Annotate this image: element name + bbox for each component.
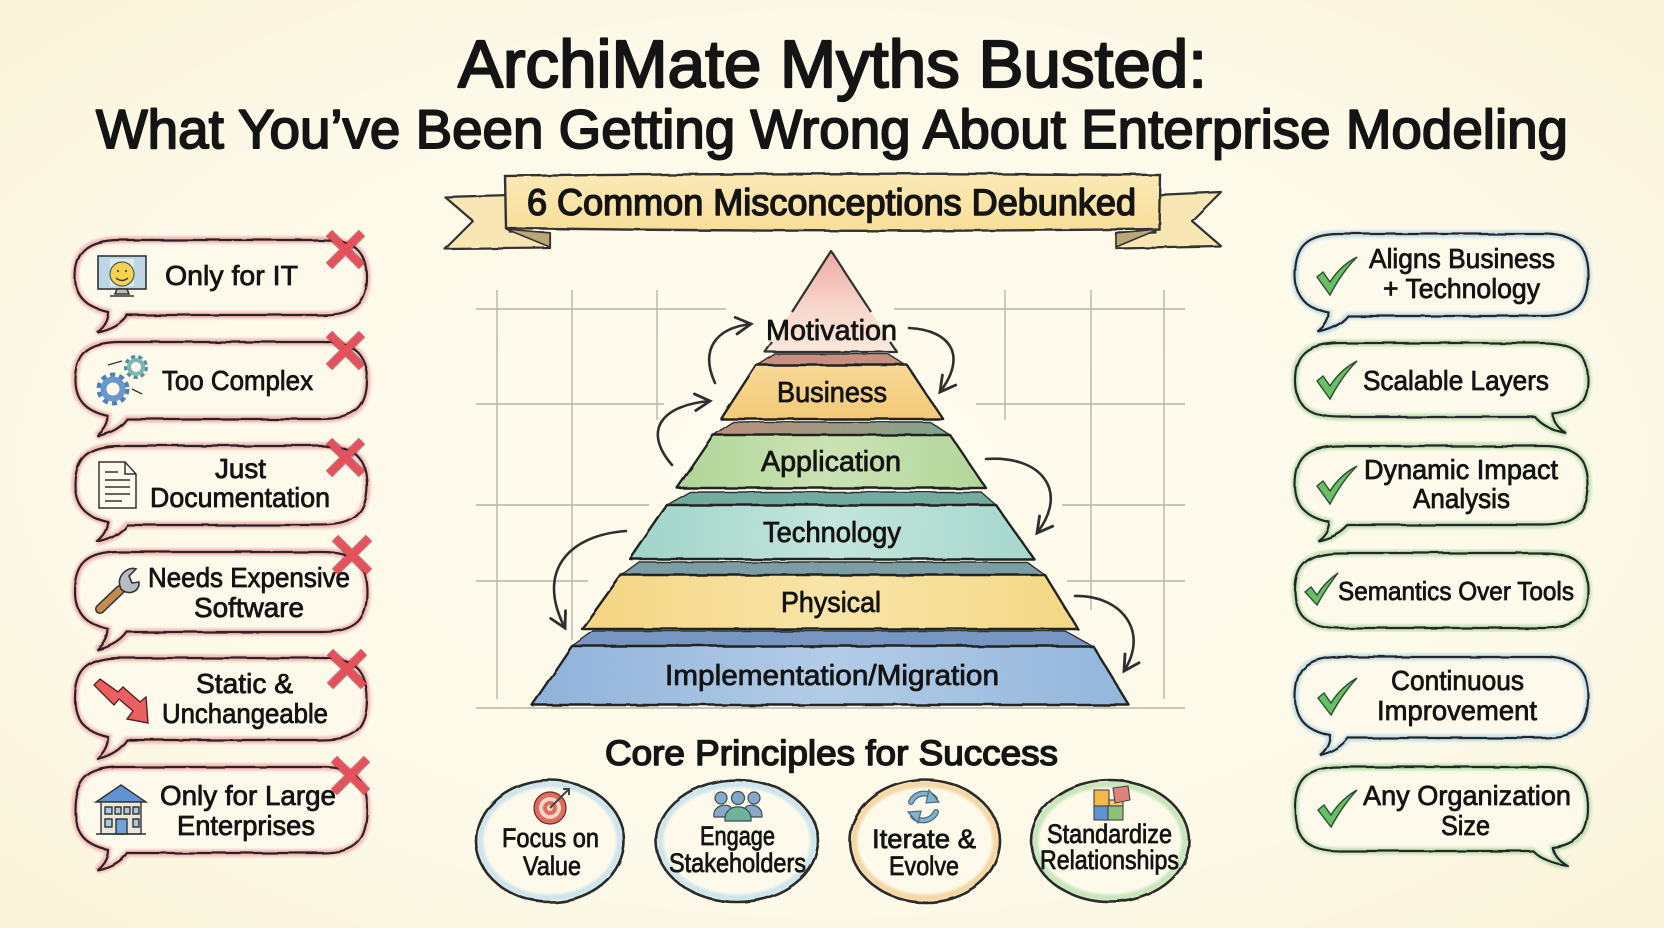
arrow: business to motivation xyxy=(709,324,751,383)
fact: semantics over tools: Semantics Over Tools xyxy=(1338,576,1574,606)
fact: dynamic impact analysis: Dynamic Impact xyxy=(1364,454,1558,485)
heading: core principles: Core Principles for Success xyxy=(605,734,1058,773)
layer: implementation/migration: Implementation/Migration xyxy=(665,660,999,692)
layer: application xyxy=(677,422,986,488)
myth: static and unchangeable: Static & xyxy=(196,668,293,699)
banner folds xyxy=(506,229,1159,247)
icon: check xyxy=(1318,790,1357,827)
icon: red x xyxy=(334,759,367,792)
title: ArchiMate Myths Busted: xyxy=(458,27,1207,102)
pyramid xyxy=(532,251,1129,705)
myth: static and unchangeable xyxy=(75,652,367,759)
banner text: 6 Common Misconceptions Debunked xyxy=(527,182,1136,223)
layer: application: Application xyxy=(761,446,901,478)
myth: too complex xyxy=(75,334,367,436)
icon: gears xyxy=(99,357,146,403)
banner left tail xyxy=(445,195,550,249)
icon: red x xyxy=(329,233,362,266)
icon: check xyxy=(1305,573,1338,605)
icon: cycle arrows xyxy=(908,790,939,823)
layer: physical: Physical xyxy=(781,587,881,619)
principle: focus on value: Value xyxy=(523,851,581,881)
principle: engage stakeholders: Engage xyxy=(700,821,775,851)
layer: business: Business xyxy=(777,377,887,409)
icon: red x xyxy=(335,538,369,572)
layer: technology xyxy=(630,492,1034,559)
icon: puzzle xyxy=(1094,786,1130,820)
arrow: physical to implementation xyxy=(1075,596,1134,671)
icon: red x xyxy=(329,334,362,367)
fact: aligns business and technology xyxy=(1295,234,1588,332)
principle: focus on value: Focus on xyxy=(502,823,599,853)
fact: scalable layers: Scalable Layers xyxy=(1363,365,1549,396)
banner xyxy=(445,174,1221,249)
panel: core principles xyxy=(476,780,1189,902)
title xyxy=(96,27,1568,160)
arrow: application to technology xyxy=(986,459,1051,533)
layer: physical xyxy=(582,562,1078,629)
icon: check xyxy=(1318,678,1357,715)
layer: business xyxy=(721,354,943,419)
layer: motivation: Motivation xyxy=(766,315,897,347)
principle: standardize relationships xyxy=(1031,780,1189,902)
fact: semantics over tools xyxy=(1295,553,1588,628)
fact: any organization size: Size xyxy=(1441,810,1490,841)
myth: static and unchangeable: Unchangeable xyxy=(162,698,328,729)
icon: check xyxy=(1317,361,1357,399)
fact: continuous improvement: Continuous xyxy=(1391,665,1524,696)
myth: too complex: Too Complex xyxy=(162,365,313,396)
principle: engage stakeholders xyxy=(656,780,818,902)
principle: engage stakeholders: Stakeholders xyxy=(669,848,806,878)
fact: any organization size xyxy=(1295,767,1588,866)
panel: myths xyxy=(75,233,369,870)
icon: wrench xyxy=(100,569,139,609)
principle: focus on value xyxy=(476,780,624,902)
fact: aligns business and technology: + Technology xyxy=(1383,273,1540,304)
fact: aligns business and technology: Aligns Business xyxy=(1369,243,1555,274)
icon: check xyxy=(1317,257,1357,295)
principle: iterate and evolve xyxy=(850,780,1000,902)
myth: needs expensive software: Software xyxy=(194,592,304,623)
fact: dynamic impact analysis: Analysis xyxy=(1413,483,1510,514)
icon: building xyxy=(96,785,146,834)
fact: continuous improvement: Improvement xyxy=(1377,695,1537,726)
fact: continuous improvement xyxy=(1295,657,1588,755)
arrows between layers xyxy=(554,324,1134,671)
fact: any organization size: Any Organization xyxy=(1363,780,1571,811)
principle: standardize relationships: Standardize xyxy=(1047,819,1172,849)
myth: only for large enterprises: Enterprises xyxy=(177,810,315,841)
myth: just documentation: Documentation xyxy=(150,482,330,513)
fact: scalable layers xyxy=(1295,343,1588,433)
arrow: technology to implementation xyxy=(554,531,626,628)
arrow: motivation to business xyxy=(909,328,954,392)
icon: document xyxy=(99,462,136,508)
myth: needs expensive software xyxy=(75,538,369,650)
icon: check xyxy=(1317,466,1357,504)
myth: only for large enterprises: Only for Large xyxy=(160,780,336,811)
principle: iterate and evolve: Evolve xyxy=(889,851,959,881)
banner right tail xyxy=(1116,192,1221,248)
icon: red x xyxy=(329,441,362,474)
panel: facts xyxy=(1295,234,1588,866)
principle: standardize relationships: Relationships xyxy=(1040,845,1179,875)
myth: only for IT: Only for IT xyxy=(165,260,298,291)
icon: red x xyxy=(330,652,364,686)
banner ribbon xyxy=(505,174,1160,231)
myth: needs expensive software: Needs Expensive xyxy=(148,562,350,593)
icon: monitor smiley xyxy=(98,256,146,296)
title: What You’ve Been Getting Wrong About Enterprise Modeling xyxy=(96,98,1568,160)
layer: implementation/migration xyxy=(532,631,1129,705)
layer: technology: Technology xyxy=(763,517,901,549)
fact: dynamic impact analysis xyxy=(1295,446,1588,541)
myth: just documentation: Just xyxy=(215,453,266,484)
arrow: application to business xyxy=(658,401,710,465)
principle: iterate and evolve: Iterate & xyxy=(872,824,976,854)
icon: people xyxy=(714,792,762,821)
layer: motivation xyxy=(765,251,897,352)
myth: just documentation xyxy=(75,441,367,542)
myth: only for large enterprises xyxy=(75,759,367,870)
icon: target xyxy=(534,789,569,824)
myth: only for IT xyxy=(75,233,367,332)
icon: falling arrow xyxy=(94,679,148,723)
